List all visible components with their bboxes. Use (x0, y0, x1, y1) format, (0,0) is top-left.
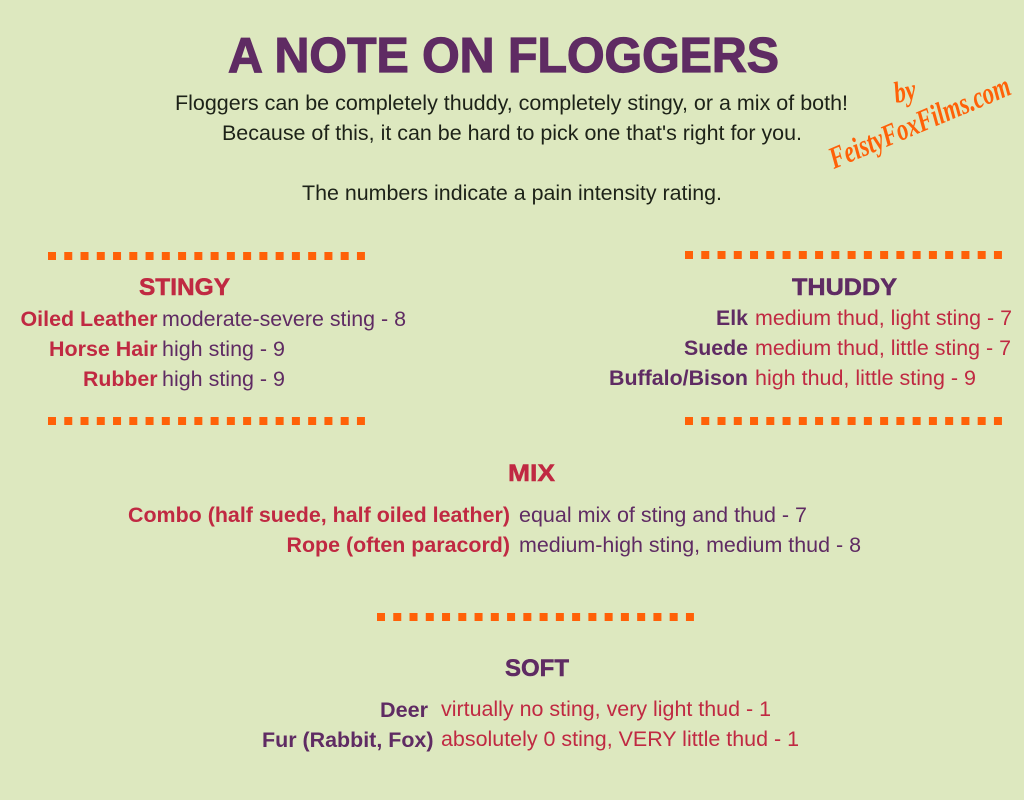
panel: thuddy (609, 274, 1012, 390)
panel: mix (128, 460, 861, 557)
heading: stingy: STINGY (139, 274, 230, 301)
stingy list: moderate-severe sting - 8 (162, 306, 406, 331)
soft list: Deer (380, 697, 429, 722)
stingy list: Rubber (83, 366, 158, 391)
stingy list: high sting - 9 (162, 366, 285, 391)
stingy list: high sting - 9 (162, 336, 285, 361)
mix list (128, 502, 861, 557)
stingy list (20, 306, 406, 391)
intro text: Because of this, it can be hard to pick one that's right for you. (222, 120, 802, 145)
mix list: medium-high sting, medium thud - 8 (519, 532, 861, 557)
thuddy list: medium thud, little sting - 7 (755, 335, 1011, 360)
heading: mix: MIX (508, 460, 555, 487)
stingy list: Oiled Leather (20, 306, 158, 331)
mix list: equal mix of sting and thud - 7 (519, 502, 807, 527)
mix list: Rope (often paracord) (286, 532, 510, 557)
intro text (175, 90, 848, 205)
heading: thuddy: THUDDY (792, 274, 897, 301)
title: A NOTE ON FLOGGERS (228, 29, 779, 83)
soft list: absolutely 0 sting, VERY little thud - 1 (441, 726, 799, 751)
heading: soft: SOFT (505, 655, 569, 682)
thuddy list: Buffalo/Bison (609, 365, 748, 390)
intro text: Floggers can be completely thuddy, completely stingy, or a mix of both! (175, 90, 848, 115)
mix list: Combo (half suede, half oiled leather) (128, 502, 510, 527)
credit: FeistyFoxFilms.com: by (891, 73, 919, 110)
stingy list: Horse Hair (49, 336, 158, 361)
thuddy list: high thud, little sting - 9 (755, 365, 976, 390)
soft list: virtually no sting, very light thud - 1 (441, 696, 771, 721)
thuddy list: Elk (716, 305, 749, 330)
panel: soft (262, 655, 799, 752)
soft list: Fur (Rabbit, Fox) (262, 727, 434, 752)
thuddy list: Suede (684, 335, 748, 360)
soft list (262, 696, 799, 752)
thuddy list: medium thud, light sting - 7 (755, 305, 1012, 330)
panel: stingy (20, 274, 406, 391)
thuddy list (609, 305, 1012, 390)
intro text: The numbers indicate a pain intensity rating. (302, 180, 722, 205)
